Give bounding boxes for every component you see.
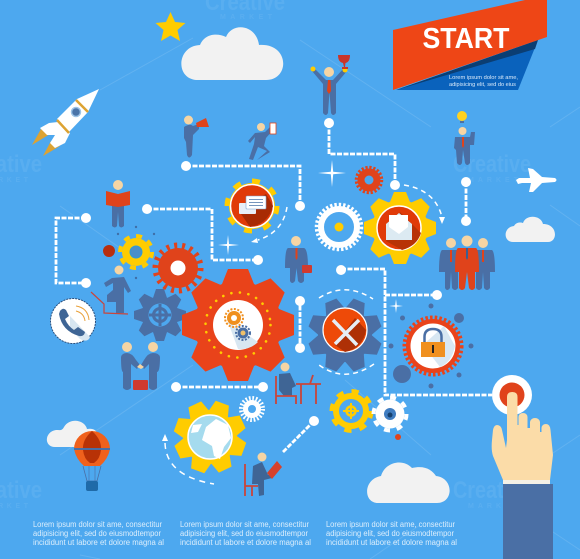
icon: rocket [32, 89, 99, 156]
dashed arc arrow: earth gear [162, 434, 214, 484]
text: MARKET [220, 14, 273, 21]
person: megaphone man [184, 116, 209, 158]
icon: phone badge [50, 298, 96, 344]
icon: white gear [316, 204, 362, 250]
text block 1: Lorem ipsum dolor sit ame, consectitur [33, 520, 162, 529]
text block 1: incididunt ut labore et dolore magna al [33, 538, 164, 547]
text: MARKET [468, 177, 519, 184]
icon: star [156, 12, 186, 41]
text block 2: incididunt ut labore et dolore magna al [180, 538, 311, 547]
banner: start [393, 0, 547, 90]
icon: hot air balloon [74, 431, 110, 491]
icon: red dot [103, 245, 115, 257]
text block 2 [180, 520, 311, 547]
person: trophy winner [310, 55, 350, 115]
icon: hand pressing button [492, 392, 553, 559]
connector nodes [81, 118, 471, 426]
text: Creative [453, 477, 531, 504]
person: man with briefcase [285, 236, 312, 283]
icon: right cloud [506, 217, 555, 242]
person: seated at desk [276, 362, 321, 404]
icon: red sunburst gear [156, 246, 200, 290]
text block 2: adipisicing elit, sed do eiusmodtempor [180, 529, 308, 538]
icon: yellow small gear [120, 236, 152, 268]
dashed arc arrow: envelope gear [404, 185, 445, 224]
banner: start: START [422, 23, 510, 55]
text: Creative [453, 151, 531, 178]
gear: central red gear [182, 269, 294, 381]
icon: small red gear [356, 168, 382, 192]
banner: start: adipisicing elit, sed do eius [449, 82, 516, 88]
person: idea man with bulb [454, 111, 475, 165]
icon: small red dot [395, 434, 401, 440]
icon: bottom cloud [367, 462, 450, 503]
person: book reader [106, 180, 130, 228]
text block 2: Lorem ipsum dolor sit ame, consectitur [180, 520, 309, 529]
gear: wrench [307, 297, 383, 373]
icon: airplane [516, 168, 556, 192]
icon: decorative blue dots [388, 304, 474, 388]
text block 3: adipisicing elit, sed do eiusmodtempor [326, 529, 454, 538]
text block 3: Lorem ipsum dolor sit ame, consectitur [326, 520, 455, 529]
icon: left cloud [47, 421, 97, 447]
person: climbing man [91, 266, 131, 314]
people: handshake [121, 342, 160, 390]
person: seated reader [245, 452, 282, 496]
icon: blue gear [134, 289, 186, 341]
button: press start [492, 375, 532, 415]
banner: start: Lorem ipsum dolor sit ame, [449, 75, 518, 81]
gear: chat [227, 181, 277, 231]
text block 1: adipisicing elit, sed do eiusmodtempor [33, 529, 161, 538]
icon: white small gear [242, 398, 262, 420]
dashed arc arrows: wrench gear [319, 290, 374, 374]
people: team trio [439, 236, 495, 290]
text block 3: incididunt ut labore et dolore magna al [326, 538, 457, 547]
dashed arc arrow: chat gear [251, 207, 287, 243]
icon: yellow gear [332, 392, 370, 430]
dotted connector lines [56, 123, 492, 452]
sparkles [218, 160, 403, 313]
text: MARKET [468, 503, 519, 510]
gear: envelope [364, 192, 436, 264]
person: running man [248, 123, 276, 160]
text block 3 [326, 520, 457, 547]
text block 1 [33, 520, 164, 547]
gear: padlock [405, 318, 461, 374]
icon: white eye gear [374, 398, 406, 430]
icon: top cloud [181, 27, 283, 80]
gear: earth [173, 400, 247, 474]
